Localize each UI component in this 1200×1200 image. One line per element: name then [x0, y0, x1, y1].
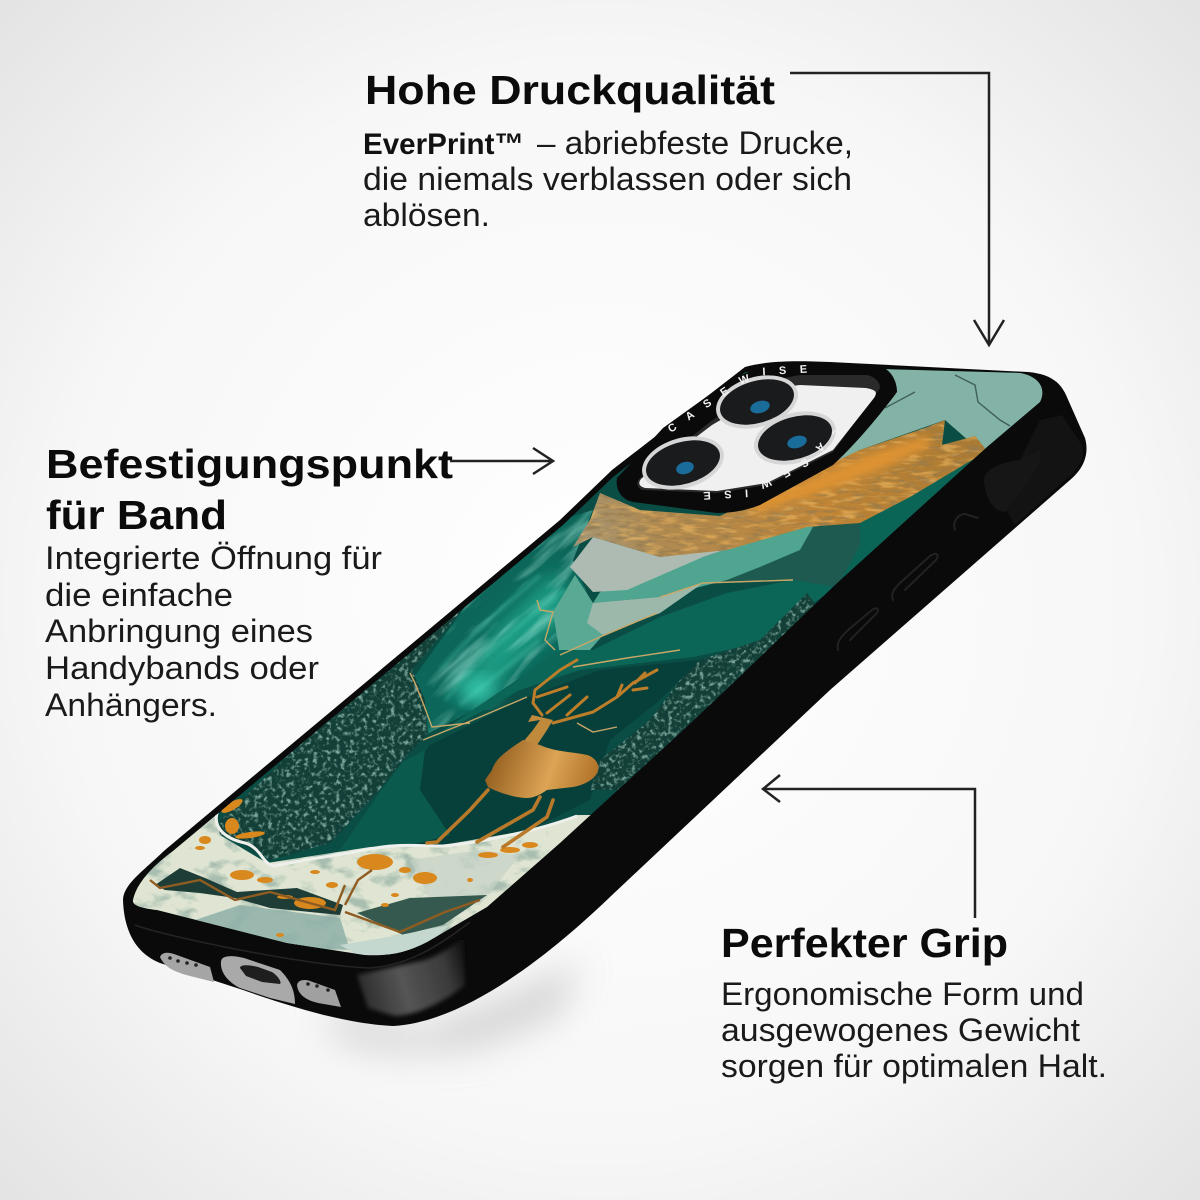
- text block: Anbringung eines: [45, 613, 313, 649]
- bright teal glow: [455, 570, 575, 700]
- phone shadow: [330, 960, 580, 1052]
- speaker dots left: [168, 956, 198, 967]
- deer legs: [427, 790, 553, 847]
- case side highlight top right: [1000, 415, 1083, 525]
- edge sheen: [135, 922, 470, 968]
- marble lower pale teal: [196, 905, 348, 950]
- marble vein texture: [134, 815, 580, 952]
- orange foliage flecks: [195, 797, 538, 937]
- speaker right: [297, 980, 341, 1007]
- streak field base: [412, 510, 600, 735]
- artwork base: [120, 360, 1070, 970]
- gold swath: [573, 420, 993, 557]
- heading: [46, 441, 453, 538]
- arrow: strap attachment: [450, 448, 553, 474]
- camera module: [616, 365, 897, 513]
- text block: Ergonomische Form und: [721, 976, 1084, 1012]
- case corner highlight: [357, 938, 465, 1016]
- marble right dark green: [357, 895, 487, 935]
- lens right: [748, 402, 842, 474]
- gold textures: [573, 423, 985, 556]
- text block: Anhängers.: [45, 687, 217, 723]
- marble right shading: [410, 850, 520, 905]
- grey patch lower: [587, 583, 703, 635]
- teal patch lower left: [340, 750, 450, 850]
- pale teal upper: [593, 523, 813, 603]
- deer body: [485, 740, 598, 798]
- marble veins: [885, 375, 1010, 426]
- bottom ports: [160, 953, 341, 1007]
- callout: Hohe Druckqualität: [363, 67, 853, 233]
- camera ring: [617, 362, 897, 513]
- forest right: [590, 593, 820, 790]
- deer neck and head: [523, 715, 553, 745]
- deep teal right band: [836, 458, 974, 584]
- darker teal grey band: [722, 523, 860, 586]
- bright teal streak lines: [440, 575, 565, 705]
- text block: die einfache: [45, 577, 233, 613]
- brand text on ring: CASEWISE: [704, 430, 836, 500]
- branch veins: [150, 870, 480, 932]
- arrow: grip to case side: [763, 775, 975, 918]
- text block: die niemals verblassen oder sich: [363, 161, 852, 197]
- marble dark band: [155, 868, 343, 915]
- callout: Perfekter Grip: [721, 920, 1107, 1084]
- lens left: [636, 427, 730, 499]
- white marble bottom: [132, 814, 590, 956]
- streak texture: [427, 510, 593, 734]
- speaker dots right: [306, 982, 330, 992]
- heading: Befestigungspunkt: [46, 441, 453, 487]
- lens top: [710, 366, 804, 438]
- text block: EverPrint™: [363, 128, 524, 161]
- forest left: [218, 610, 461, 860]
- heading: Perfekter Grip: [721, 920, 1008, 966]
- camera glass: [639, 385, 876, 491]
- camera window dark band: [637, 375, 880, 493]
- deep teal band: [430, 580, 837, 740]
- text block: ausgewogenes Gewicht: [721, 1012, 1080, 1048]
- arrow: top callout to case top: [790, 73, 1004, 345]
- gold veins: [410, 580, 793, 740]
- marble white ribbon: [216, 810, 577, 866]
- text block: Integrierte Öffnung für: [45, 540, 382, 576]
- deer antlers: [533, 660, 657, 723]
- case artwork: [120, 360, 1070, 970]
- text block: sorgen für optimalen Halt.: [721, 1048, 1107, 1084]
- bright teal core: [460, 679, 496, 701]
- phone case: [123, 361, 1087, 1026]
- brand text on ring: [668, 365, 836, 500]
- text block: [363, 125, 853, 233]
- pale grey patch: [570, 537, 733, 592]
- text block: [721, 976, 1107, 1084]
- text block: ablösen.: [363, 197, 490, 233]
- text block: – abriebfeste Drucke,: [537, 125, 853, 161]
- side vent: [984, 450, 1041, 512]
- brand text on ring: CASEWISE: [668, 365, 807, 432]
- forest texture: [218, 594, 813, 860]
- heading: für Band: [46, 492, 227, 538]
- speaker left: [160, 953, 214, 982]
- pale teal wash: [554, 575, 696, 650]
- callout: Befestigungspunkt: [45, 441, 453, 723]
- dark lower center: [400, 660, 700, 850]
- teal marble top right: [838, 369, 1042, 460]
- text block: [45, 540, 382, 723]
- heading: Hohe Druckqualität: [365, 67, 775, 113]
- marble bottom pale: [340, 925, 450, 956]
- charging port: [221, 956, 295, 1004]
- gold highlight: [740, 436, 932, 512]
- deer: [427, 660, 657, 847]
- charging port opening: [240, 965, 281, 984]
- case body: [123, 361, 1087, 1026]
- text block: Handybands oder: [45, 650, 319, 686]
- side buttons: [838, 514, 978, 650]
